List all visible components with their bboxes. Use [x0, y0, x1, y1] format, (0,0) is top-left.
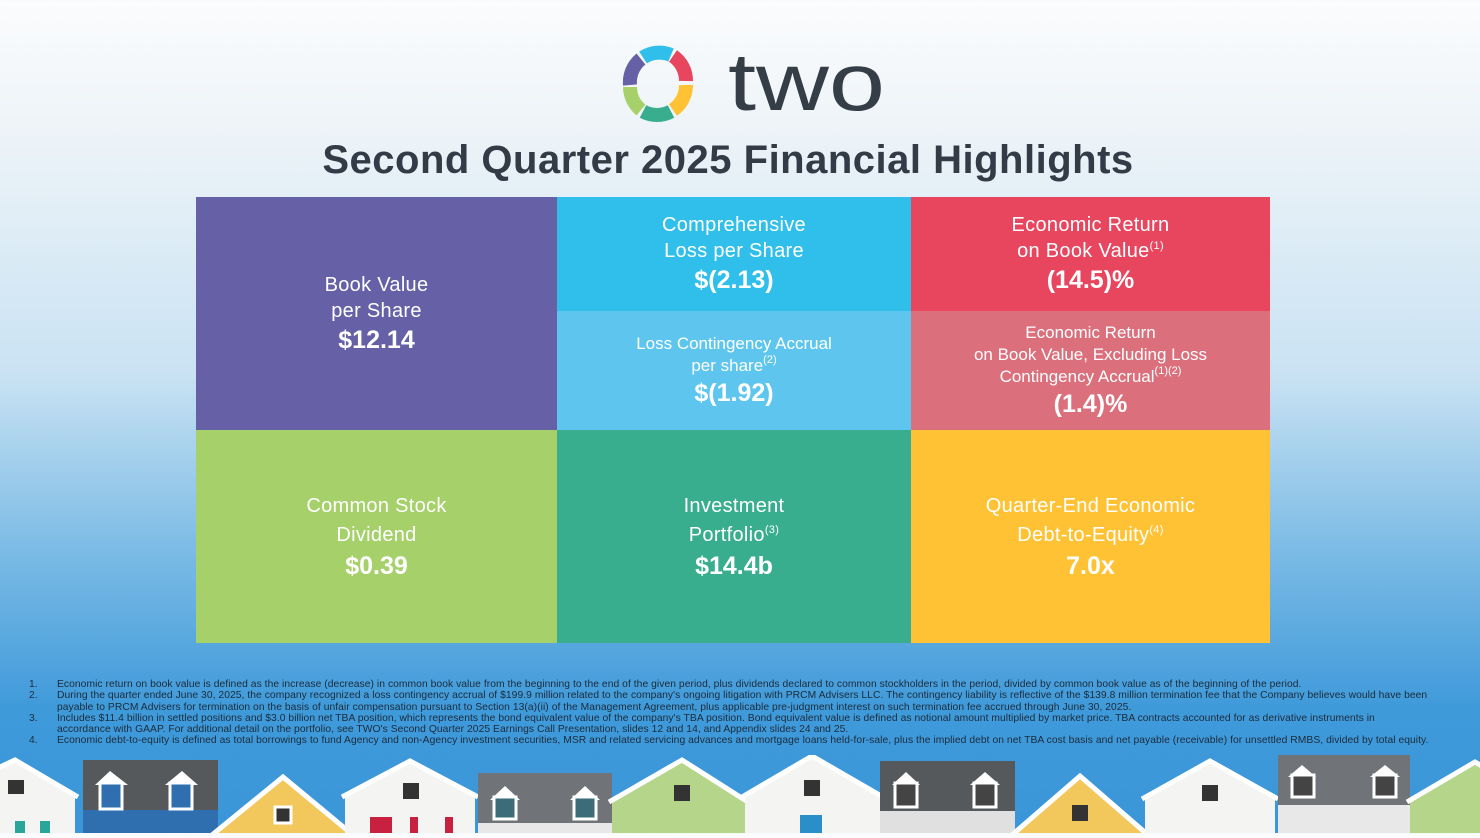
panel: loss contingency: $(1.92) — [694, 378, 774, 406]
panel: dividend: Dividend — [336, 524, 417, 546]
footnotes: payable to PRCM Advisers for termination on the basis of unfair compensation pursuant to Section 13(a)(ii) of the Management Agreement, plus applicable pre-judgment interest on such termination fee accrued through June 30, 2025. — [57, 702, 1131, 713]
panel: book value: Book Value — [325, 274, 428, 296]
panel: economic return — [911, 197, 1270, 311]
panel: economic return: Economic Return — [1012, 214, 1169, 236]
footnotes: Economic debt-to-equity is defined as total borrowings to fund Agency and non-Agency investment securities, MSR and related servicing advances and mortgage loans held-for-sale, plus the implied debt on net TBA cost basis and net payable (receivable) for unsettled RMBS, divided by total equity. — [57, 735, 1428, 746]
footnotes — [29, 679, 1428, 746]
panel: book value: per Share — [331, 300, 422, 322]
panel: economic return excl: Economic Return — [1025, 322, 1156, 342]
panel: loss contingency — [557, 311, 911, 430]
footnotes: 1. — [29, 679, 38, 690]
panel: economic return excl: (1.4)% — [1054, 390, 1127, 418]
panel: debt to equity: Quarter-End Economic — [986, 494, 1195, 516]
panel: loss contingency: Loss Contingency Accrual — [636, 334, 832, 352]
panel: portfolio: $14.4b — [695, 552, 773, 580]
panel: dividend — [196, 430, 557, 643]
panel: portfolio: Portfolio(3) — [689, 524, 779, 546]
panel: economic return: on Book Value(1) — [1017, 240, 1164, 262]
footnotes: Includes $11.4 billion in settled positions and $3.0 billion net TBA position, which represents the bond equivalent value of the company's TBA position. Bond equivalent value is defined as notional amount multiplied by market price. TBA contracts accounted for as derivative instruments in — [57, 713, 1375, 724]
panel: economic return: (14.5)% — [1047, 266, 1134, 294]
panel: comprehensive loss — [557, 197, 911, 311]
panel: economic return excl: on Book Value, Excluding Loss — [974, 344, 1207, 364]
panel: debt to equity: 7.0x — [1066, 552, 1115, 580]
panel: loss contingency: per share(2) — [691, 354, 777, 374]
panel: book value — [196, 197, 557, 430]
footnotes: 4. — [29, 735, 38, 746]
title: Second Quarter 2025 Financial Highlights — [322, 138, 1134, 182]
panel: portfolio: Investment — [684, 494, 784, 516]
footnotes: Economic return on book value is defined as the increase (decrease) in common book value from the beginning to the end of the given period, plus dividends declared to common stockholders in the period, divided by common book value as of the beginning of the period. — [57, 679, 1301, 690]
panel: dividend: Common Stock — [306, 494, 447, 516]
panel: comprehensive loss: Loss per Share — [664, 240, 804, 262]
panel: debt to equity — [911, 430, 1270, 643]
panel: dividend: $0.39 — [345, 552, 408, 580]
panel: economic return excl: Contingency Accrual(1)(2) — [1000, 364, 1181, 386]
panel: debt to equity: Debt-to-Equity(4) — [1017, 524, 1164, 546]
footnotes: 2. — [29, 690, 38, 701]
panel: economic return excl — [911, 311, 1270, 430]
panel: portfolio — [557, 430, 911, 643]
footnotes: 3. — [29, 713, 38, 724]
logo — [622, 38, 885, 128]
houses — [0, 755, 1480, 833]
logo: two — [728, 38, 885, 128]
panel: comprehensive loss: Comprehensive — [662, 214, 806, 236]
footnotes: During the quarter ended June 30, 2025, the company recognized a loss contingency accrual of $199.9 million related to the company's ongoing litigation with PRCM Advisers LLC. The contingency liability is reflective of the $139.8 million termination fee that the Company believes would have been — [57, 690, 1427, 701]
footnotes: accordance with GAAP. For additional detail on the portfolio, see TWO's Second Quarter 2025 Earnings Call Presentation, slides 12 and 14, and Appendix slides 24 and 25. — [57, 724, 848, 735]
panel: book value: $12.14 — [338, 326, 415, 354]
panel: comprehensive loss: $(2.13) — [694, 266, 774, 294]
